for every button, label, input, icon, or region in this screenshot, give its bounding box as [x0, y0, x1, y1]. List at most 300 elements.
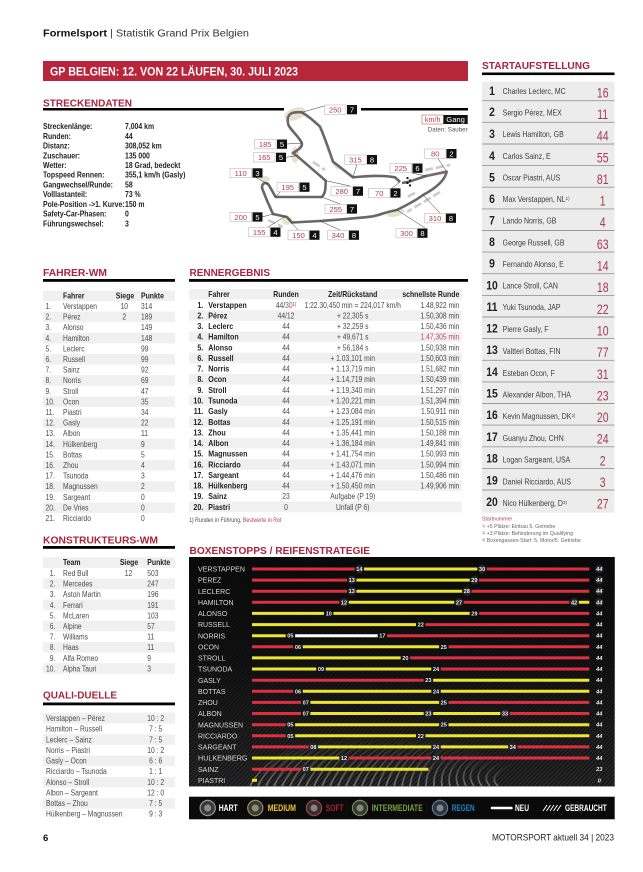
row: Magnussen: 25 — [441, 723, 447, 729]
constructors championship table: 10. — [46, 664, 55, 674]
starting grid table: 4 — [600, 215, 606, 231]
race result table: 1.51,297 min — [420, 385, 459, 395]
circuit data list: Distanz: — [43, 141, 70, 151]
race result table: 13. — [193, 428, 203, 438]
starting grid table: Lance Stroll, CAN — [503, 281, 558, 291]
race result table: 1.50,188 min — [420, 428, 459, 438]
speed label 70: 70 — [375, 189, 383, 198]
row: Alonso: 10 — [326, 611, 332, 617]
row: Zhou: 07 — [303, 700, 309, 706]
drivers championship table: Hülkenberg — [63, 439, 97, 449]
circuit data list: 355,1 km/h (Gasly) — [125, 170, 186, 180]
row: Piastri — [198, 778, 602, 785]
starting grid table: 10 — [486, 280, 498, 293]
race result table: 1.50,911 min — [421, 406, 459, 416]
race result table: Alonso — [208, 343, 233, 352]
constructors championship table: Alfa Romeo — [63, 653, 98, 663]
race result table: Sainz — [208, 492, 227, 501]
race result table: Fahrer — [208, 289, 230, 299]
drivers championship table: Verstappen — [63, 301, 97, 311]
drivers championship table: 3. — [46, 323, 51, 332]
race result table: 1) — [293, 301, 297, 307]
map legend: km/h — [425, 115, 440, 124]
starting grid table: 6 — [489, 194, 495, 206]
drivers championship table: 99 — [141, 354, 148, 364]
row: Stroll: STROLL — [198, 656, 225, 662]
drivers championship table: 2 — [122, 312, 126, 322]
row: Leclerc: 13 — [349, 589, 355, 595]
race result table: Verstappen — [208, 300, 247, 310]
speed label 110 — [230, 168, 262, 178]
speed label 155 — [248, 228, 280, 237]
constructors championship table: Aston Martin — [63, 590, 101, 599]
race result table: Stroll — [208, 385, 227, 395]
starting grid table: 24 — [597, 431, 609, 447]
row: Leclerc: LECLERC — [198, 589, 230, 596]
row: Perez: 29 — [471, 578, 478, 584]
drivers championship table: 14. — [46, 439, 55, 449]
row: Perez: PEREZ — [198, 578, 222, 585]
row: Zhou: ZHOU — [198, 700, 218, 707]
drivers championship table: Punkte — [141, 291, 164, 301]
race result table: 9. — [197, 385, 203, 395]
row: Stroll: 44 — [595, 656, 603, 662]
drivers championship table: Ricciardo — [63, 513, 91, 523]
starting grid table: Valtteri Bottas, FIN — [503, 347, 561, 356]
constructors championship table: Alpha Tauri — [63, 664, 97, 674]
starting grid table: 77 — [597, 345, 609, 360]
row: Sargeant: 08 — [310, 745, 317, 751]
qualifying duels table: 12 : 0 — [147, 788, 164, 798]
speed label 255: 255 — [329, 205, 342, 214]
starting grid table: Logan Sargeant, USA — [503, 455, 570, 465]
row: Verstappen — [198, 565, 604, 574]
row: Albon: 44 — [595, 712, 603, 718]
speed label 315: 8 — [370, 156, 374, 164]
row: Gasly: 23 — [425, 678, 432, 684]
legend: used tyres — [543, 803, 607, 813]
race result table: Albon — [208, 438, 229, 448]
drivers championship table: 0 — [141, 492, 145, 502]
row: Sargeant: 24 — [433, 745, 440, 751]
race result table: + 1.19,340 min — [330, 385, 375, 395]
constructors championship table: 11 — [147, 632, 154, 642]
starting grid table: 81 — [597, 171, 609, 187]
speed label 165: 165 — [258, 153, 271, 162]
row: Tsunoda: 09 — [318, 667, 324, 673]
starting grid table: 3 — [489, 129, 495, 141]
drivers championship table: 4 — [141, 460, 145, 470]
drivers championship table: Hamilton — [63, 333, 89, 343]
row: Sainz: SAINZ — [198, 767, 219, 774]
row: Ricciardo — [198, 733, 603, 740]
constructors championship table: 191 — [147, 600, 159, 610]
qualifying duels table: 7 : 5 — [149, 724, 162, 734]
speed label 250: 7 — [350, 106, 354, 114]
qualifying duels table: Hülkenberg – Magnussen — [46, 809, 122, 819]
starting grid table: Oscar Piastri, AUS — [503, 173, 560, 183]
starting grid table: 10 — [597, 323, 609, 339]
starting grid table: George Russell, GB — [503, 238, 565, 247]
race result table: + 1.25,191 min — [330, 417, 375, 427]
row: Magnussen: 44 — [595, 723, 603, 729]
drivers championship table: 148 — [141, 333, 152, 343]
heading: Quali-Duelle — [43, 691, 175, 705]
row: Albon: 33 — [502, 712, 508, 718]
drivers championship table: Zhou — [63, 460, 78, 470]
speed label 185: 5 — [280, 140, 284, 149]
race result table: 44 — [282, 364, 290, 374]
row: Zhou: 44 — [595, 700, 603, 706]
row: Norris: 44 — [595, 634, 603, 640]
constructors championship table: 2. — [50, 579, 55, 589]
starting grid table: 9 — [489, 258, 495, 271]
speed label 70 — [368, 188, 400, 198]
constructors championship table: Mercedes — [63, 579, 93, 589]
row: Hamilton: 44 — [595, 600, 603, 606]
starting grid table: Charles Leclerc, MC — [503, 87, 566, 96]
starting grid table: 20 — [597, 410, 609, 425]
speed label 340: 8 — [352, 231, 356, 240]
drivers championship table: 189 — [141, 312, 152, 322]
race result table: 44 — [282, 321, 290, 331]
race result table: 1.49,841 min — [420, 438, 459, 448]
drivers championship table: Magnussen — [63, 482, 98, 491]
speed label 310 — [424, 214, 456, 223]
race result table: 44 — [282, 396, 290, 406]
race result table: Piastri — [208, 502, 230, 512]
starting grid table: 18 — [486, 453, 498, 466]
drivers championship table: 69 — [141, 376, 148, 385]
drivers championship table: 13. — [46, 429, 55, 438]
race result table: 1.50,993 min — [420, 449, 459, 459]
starting grid table: 63 — [597, 236, 609, 252]
race result table: Zhou — [208, 428, 226, 438]
race result table: + 1.43,071 min — [330, 460, 375, 469]
heading: Streckendaten: STRECKENDATEN — [43, 98, 132, 110]
starting grid table: Yuki Tsunoda, JAP — [503, 303, 561, 312]
circuit data list: 150 m — [125, 199, 145, 209]
speed label 195: 5 — [302, 183, 307, 192]
starting grid table: 27 — [597, 496, 609, 512]
drivers championship table: Russell — [63, 354, 85, 364]
constructors championship table: 12 — [125, 568, 132, 578]
race result table: 1.51,394 min — [420, 396, 459, 406]
starting grid table: Fernando Alonso, E — [503, 260, 564, 269]
constructors championship table: Siege — [120, 558, 138, 567]
starting grid table: 11 — [597, 107, 608, 122]
race result table: 3. — [197, 321, 203, 331]
speed label 300: 8 — [420, 229, 425, 238]
row: Piastri: 0 — [598, 778, 602, 784]
constructors championship table: Haas — [63, 643, 79, 652]
starting grid table: 23 — [597, 388, 609, 404]
row: Bottas: 06 — [295, 689, 301, 695]
qualifying duels table: 6 : 6 — [149, 756, 162, 766]
starting grid table: Kevin Magnussen, DK — [503, 412, 571, 421]
race result table: 44 — [282, 406, 290, 416]
drivers championship table: 20. — [46, 503, 55, 513]
race result table: 44 — [282, 343, 290, 352]
constructors championship table: Ferrari — [63, 600, 83, 610]
row: Hulkenberg: 24 — [433, 756, 440, 762]
speed label 185: 185 — [259, 140, 272, 149]
drivers championship table: Albon — [63, 429, 80, 438]
drivers championship table: Siege — [116, 291, 134, 301]
qualifying duels table: 7 : 5 — [149, 798, 162, 808]
drivers championship table: Stroll — [63, 386, 79, 396]
drivers championship table: Tsunoda — [63, 471, 89, 481]
race result table: 1.49,906 min — [420, 481, 459, 491]
race result table: + 49,671 s — [337, 332, 369, 342]
race result table: 1.50,486 min — [420, 470, 459, 480]
race result table: + 1.20,221 min — [330, 396, 375, 406]
starting grid table: 11 — [487, 302, 497, 314]
race result table: Ricciardo — [208, 460, 241, 469]
speed label 165: 5 — [279, 153, 283, 162]
row: Sargeant: 34 — [510, 745, 517, 751]
starting grid table: Guanyu Zhou, CHN — [503, 434, 564, 443]
row: Bottas: BOTTAS — [198, 689, 226, 696]
race result table: 1.50,439 min — [420, 375, 459, 384]
qualifying duels table: Bottas – Zhou — [46, 798, 88, 808]
row: Bottas: 44 — [595, 689, 603, 695]
drivers championship table: 6. — [46, 354, 51, 364]
speed label 280: 280 — [335, 187, 348, 196]
heading: Fahrer-WM — [43, 268, 175, 282]
starting grid table: Carlos Sainz, E — [503, 151, 551, 161]
row: Alonso — [198, 611, 603, 618]
starting grid table: Alexander Albon, THA — [503, 390, 571, 400]
starting grid footnotes — [482, 516, 581, 544]
row: Albon: 23 — [425, 712, 432, 718]
row: Alonso: 44 — [595, 611, 603, 617]
race result table: 19. — [193, 492, 203, 501]
speed label 165 — [254, 153, 286, 162]
drivers championship table: 92 — [141, 365, 148, 375]
circuit data list: 58 — [125, 180, 133, 190]
race result table: + 1.44,476 min — [330, 470, 375, 480]
row: Hamilton: 27 — [456, 600, 462, 606]
starting grid table: 1) — [566, 196, 570, 201]
circuit data list: Volllastanteil: — [43, 190, 87, 199]
heading: Quali-Duelle: QUALI-DUELLE — [43, 691, 117, 702]
heading: Rennergebnis: RENNERGEBNIS — [190, 268, 270, 279]
speed label 70: 2 — [393, 189, 398, 198]
speed label 195 — [277, 182, 310, 192]
starting grid footnotes: +3 Plätze: Behinderung im Qualifying — [485, 531, 573, 537]
starting grid footnotes: 3) — [482, 538, 486, 542]
map legend: Daten: Sauber — [428, 126, 468, 134]
drivers championship table: 0 — [141, 513, 145, 523]
race result table: 1.48,922 min — [420, 300, 459, 310]
constructors championship table: 247 — [147, 579, 159, 589]
speed label 340: 340 — [332, 231, 344, 240]
row: Norris: 05 — [287, 634, 294, 640]
race result table: 5. — [197, 343, 203, 352]
speed label 225: 225 — [394, 164, 407, 173]
race result table: 1.51,682 min — [420, 364, 459, 374]
drivers championship table: De Vries — [63, 503, 89, 513]
race result table: 7. — [197, 364, 203, 374]
legend: hart: HART — [219, 803, 238, 813]
speed label 340 — [328, 230, 359, 240]
race result table: 1. — [197, 300, 203, 310]
circuit data list: 7,004 km — [125, 121, 154, 131]
starting grid table: 14 — [597, 258, 609, 274]
drivers championship table: 8. — [46, 376, 51, 385]
race result table: 16. — [193, 460, 203, 469]
row: Sargeant: 44 — [595, 745, 603, 751]
race result table: + 1.36,184 min — [330, 438, 375, 448]
row: Norris — [198, 633, 603, 640]
qualifying duels table: Gasly – Ocon — [46, 756, 87, 766]
circuit data list — [43, 121, 186, 229]
drivers championship table: 9 — [141, 439, 145, 449]
starting grid table: 5 — [489, 172, 495, 185]
race result table: 44 — [282, 460, 290, 469]
row: Sainz: 23 — [595, 767, 603, 773]
kerbs — [287, 117, 447, 180]
starting grid table: Lando Norris, GB — [503, 216, 556, 226]
row: Gasly: GASLY — [198, 678, 221, 685]
drivers championship table: 2 — [141, 482, 145, 491]
speed label 310: 310 — [429, 214, 441, 223]
race result table: 44 — [282, 449, 290, 459]
row: Hamilton — [198, 598, 604, 607]
row: Hulkenberg: 12 — [341, 756, 347, 762]
race result table: 1.50,938 min — [420, 343, 459, 352]
race result table: 23 — [282, 492, 290, 501]
speed label 80 — [424, 149, 456, 158]
race result table: Hülkenberg — [208, 481, 248, 491]
heading: Startaufstellung — [482, 61, 614, 75]
track line — [262, 112, 447, 222]
header line: Formelsport — [43, 28, 108, 40]
starting grid table: 3 — [600, 475, 606, 490]
row: Ocon: 44 — [595, 645, 603, 651]
circuit data list: Safety-Car-Phasen: — [43, 209, 106, 219]
race result table: 10. — [193, 396, 203, 406]
row: Hamilton: 12 — [341, 600, 347, 606]
constructors championship table: 7. — [50, 632, 55, 642]
row: Zhou — [198, 700, 603, 707]
drivers championship table: 12. — [46, 418, 55, 428]
race result table: 1:22.30,450 min = 224,017 km/h — [304, 300, 401, 310]
row: Magnussen: MAGNUSSEN — [198, 722, 243, 729]
race result table: + 1.35,441 min — [330, 428, 375, 438]
starting grid table: Nico Hülkenberg, D — [503, 499, 563, 508]
starting grid table: Pierre Gasly, F — [503, 325, 549, 334]
speed label 310: 8 — [449, 214, 453, 223]
drivers championship table: 3 — [141, 471, 145, 481]
qualifying duels table: Norris – Piastri — [46, 745, 90, 755]
row: Ricciardo: 05 — [287, 734, 294, 740]
row: Ricciardo: 44 — [595, 734, 603, 740]
starting grid table: 12 — [486, 323, 498, 336]
race result table: 12. — [193, 417, 203, 427]
row: Alonso: ALONSO — [198, 611, 228, 618]
row: Perez: 13 — [349, 578, 355, 584]
track map: Spa-Francorchamps — [230, 105, 456, 240]
starting grid table: 1 — [489, 86, 495, 98]
drivers championship table: 314 — [141, 301, 152, 311]
constructors championship table: 9. — [50, 653, 55, 663]
race result table: 1.50,436 min — [420, 321, 459, 331]
drivers championship table: 35 — [141, 397, 148, 407]
circuit data list: 44 — [125, 131, 133, 141]
qualifying duels table: Verstappen – Pérez — [46, 713, 105, 723]
row: Gasly — [198, 678, 603, 685]
row: Ricciardo: RICCIARDO — [198, 733, 238, 740]
row: Zhou: 25 — [441, 700, 447, 706]
drivers championship table: 15. — [46, 450, 55, 460]
tyre legend bar — [189, 797, 615, 819]
race result table: + 1.23,084 min — [330, 406, 375, 416]
qualifying duels table: 7 : 5 — [149, 735, 162, 744]
drivers championship table: 16. — [46, 460, 55, 470]
race result table: 44 — [282, 438, 290, 448]
row: Norris: 17 — [379, 634, 386, 640]
race result table: + 22,305 s — [337, 311, 369, 321]
race result table: + 1.14,719 min — [330, 375, 375, 384]
legend: soft: SOFT — [326, 803, 344, 813]
drivers championship table: 11 — [141, 429, 148, 438]
circuit data list: Gangwechsel/Runde: — [43, 180, 113, 190]
leader lines — [255, 106, 447, 230]
drivers championship table: 47 — [141, 386, 148, 396]
race result table: 1.47,305 min — [420, 332, 459, 342]
constructors championship table: 57 — [147, 621, 155, 631]
race result table: Norris — [208, 364, 230, 374]
qualifying duels table: 10 : 2 — [147, 713, 164, 723]
starting grid table: 55 — [597, 150, 609, 166]
constructors championship table: 4. — [50, 600, 55, 610]
speed label 150 — [288, 230, 320, 240]
row: Stroll — [198, 656, 603, 662]
circuit data list: 135 000 — [125, 151, 150, 160]
legend: new tyres: NEU — [515, 803, 529, 813]
constructors championship table: 503 — [147, 568, 159, 578]
row: Sainz — [198, 765, 603, 774]
red title banner: GP BELGIEN: 12. VON 22 LÄUFEN, 30. JULI 2023 — [50, 66, 298, 79]
qualifying duels table: Leclerc – Sainz — [46, 735, 92, 744]
row: Stroll: 20 — [402, 656, 409, 662]
row: Hulkenberg — [198, 754, 603, 763]
row: Leclerc: 44 — [595, 589, 603, 595]
race result table: 8. — [197, 375, 203, 384]
race result table: 44 — [282, 385, 290, 395]
drivers championship table: Bottas — [63, 450, 82, 460]
starting grid table: 16 — [486, 410, 498, 422]
map legend — [422, 115, 468, 134]
speed label 155: 4 — [273, 228, 278, 237]
race result table: Hamilton — [208, 332, 239, 342]
race result table: 44 — [282, 332, 290, 342]
circuit data list: Topspeed Rennen: — [43, 170, 104, 180]
heading: Startaufstellung: STARTAUFSTELLUNG — [482, 61, 590, 72]
red title banner — [43, 61, 468, 81]
row: Albon — [198, 709, 603, 718]
row: Ricciardo: 22 — [418, 734, 424, 740]
circuit data list: Runden: — [43, 131, 71, 141]
row: Ocon: OCON — [198, 644, 219, 651]
qualifying duels table — [43, 713, 175, 819]
row: Bottas: 24 — [433, 689, 440, 695]
drivers championship table: 99 — [141, 344, 148, 354]
constructors championship table: Punkte — [147, 558, 170, 567]
circuit data list: 0 — [125, 209, 129, 219]
